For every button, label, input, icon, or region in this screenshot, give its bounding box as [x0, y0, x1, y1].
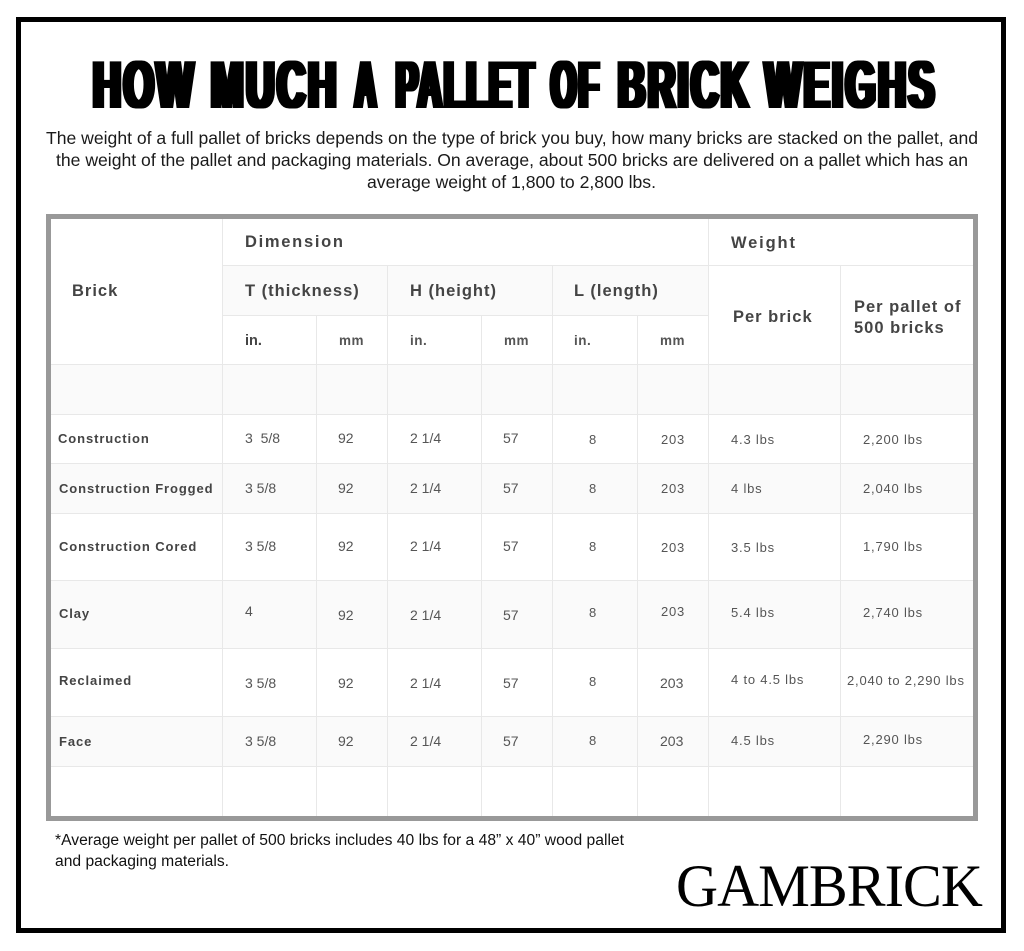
intro text: The weight of a full pallet of bricks depends on the type of brick you buy, how many bricks are stacked on the pallet, and: [46, 128, 978, 148]
row: Clay: 4: [245, 603, 253, 619]
row: Construction: 2,200 lbs: [863, 432, 923, 447]
row: Construction Frogged: 4 lbs: [731, 481, 762, 496]
header cells: in.: [410, 333, 427, 348]
row: Clay: 2,740 lbs: [863, 605, 923, 620]
title: BRICK: [618, 47, 751, 123]
row: Construction Frogged: 2 1/4: [410, 480, 441, 496]
row: Construction Frogged: [59, 480, 923, 496]
row: Face: 4.5 lbs: [731, 733, 775, 748]
row: Clay: 92: [338, 607, 354, 623]
table: [48, 216, 976, 818]
header cells: Weight: [731, 234, 796, 252]
logo: GAMBRICK: GAMBRICK: [676, 853, 983, 919]
row: Construction: [58, 430, 923, 447]
header cells: mm: [339, 333, 364, 348]
table panel: [48, 216, 976, 818]
row: Construction: Construction: [58, 431, 150, 446]
row: Reclaimed: 57: [503, 675, 519, 691]
row: Construction Cored: 2 1/4: [410, 538, 441, 554]
header cells: L (length): [574, 282, 659, 300]
row: Face: 2 1/4: [410, 733, 441, 749]
header cells: H (height): [410, 282, 497, 300]
row: Face: 3 5/8: [245, 733, 276, 749]
row: Clay: Clay: [59, 606, 90, 621]
header cells: T (thickness): [245, 282, 360, 300]
row: Reclaimed: Reclaimed: [59, 673, 132, 688]
footnote: *Average weight per pallet of 500 bricks includes 40 lbs for a 48” x 40” wood pallet: [55, 832, 625, 849]
header cells: Brick: [72, 282, 118, 300]
row: Reclaimed: 2,040 to 2,290 lbs: [847, 673, 965, 688]
header cells: in.: [574, 333, 591, 348]
row: Face: [59, 732, 923, 749]
header cells: mm: [660, 333, 685, 348]
row: Reclaimed: 3 5/8: [245, 675, 276, 691]
row: Construction Frogged: 57: [503, 480, 519, 496]
row: Construction Cored: 3 5/8: [245, 538, 276, 554]
row: Reclaimed: 203: [660, 675, 684, 691]
row: Construction: 8: [589, 432, 597, 447]
row: Clay: 2 1/4: [410, 607, 441, 623]
row: Construction Frogged: 8: [589, 481, 597, 496]
row: Construction Frogged: 3 5/8: [245, 480, 276, 496]
header cells: in.: [245, 333, 262, 349]
row: Face: 2,290 lbs: [863, 732, 923, 747]
row: Reclaimed: 2 1/4: [410, 675, 441, 691]
row: Construction Cored: 92: [338, 538, 354, 554]
row: Clay: 5.4 lbs: [731, 605, 775, 620]
row: Construction: 2 1/4: [410, 430, 441, 446]
row: Construction: 203: [661, 432, 685, 447]
row: Face: Face: [59, 734, 92, 749]
intro text: the weight of the pallet and packaging materials. On average, about 500 bricks are delivered on a pallet which has an: [56, 150, 968, 170]
title: MUCH: [211, 47, 339, 123]
header cells: mm: [504, 333, 529, 348]
header cells: 500 bricks: [854, 319, 945, 337]
intro text: average weight of 1,800 to 2,800 lbs.: [367, 172, 656, 192]
intro text: [46, 128, 978, 192]
row: Construction Frogged: 92: [338, 480, 354, 496]
row: Construction: 92: [338, 430, 354, 446]
header cells: Per brick: [733, 308, 813, 326]
row: Clay: 8: [589, 605, 597, 620]
header cells: Dimension: [245, 233, 344, 251]
footnote: [55, 832, 625, 870]
row: Face: 8: [589, 733, 597, 748]
row: Construction Cored: 3.5 lbs: [731, 540, 775, 555]
row: Clay: [59, 603, 923, 623]
header cells: [72, 233, 961, 349]
title: [93, 47, 937, 123]
row: Face: 57: [503, 733, 519, 749]
row: Construction Frogged: 2,040 lbs: [863, 481, 923, 496]
row: Clay: 57: [503, 607, 519, 623]
row: Face: 203: [660, 733, 684, 749]
row: Reclaimed: 4 to 4.5 lbs: [731, 672, 804, 687]
row: Construction Cored: 57: [503, 538, 519, 554]
row: Construction Cored: Construction Cored: [59, 539, 197, 554]
row: Clay: 203: [661, 604, 685, 619]
row: Face: 92: [338, 733, 354, 749]
row: Construction: 3 5/8: [245, 430, 280, 446]
row: Construction Cored: [59, 538, 923, 555]
row: Construction Frogged: 203: [661, 481, 685, 496]
row: Construction: 57: [503, 430, 519, 446]
title: OF: [551, 47, 601, 123]
row: Construction Frogged: Construction Frogged: [59, 481, 214, 496]
row: Construction: 4.3 lbs: [731, 432, 775, 447]
row: Reclaimed: [59, 672, 965, 691]
row: Construction Cored: 203: [661, 540, 685, 555]
title: A: [355, 47, 378, 123]
row: Construction Cored: 8: [589, 539, 597, 554]
title: PALLET: [396, 47, 536, 123]
header cells: Per pallet of: [854, 298, 961, 316]
footnote: and packaging materials.: [55, 853, 229, 870]
row: Reclaimed: 92: [338, 675, 354, 691]
title: HOW: [93, 47, 196, 123]
row: Reclaimed: 8: [589, 674, 597, 689]
row: Construction Cored: 1,790 lbs: [863, 539, 923, 554]
